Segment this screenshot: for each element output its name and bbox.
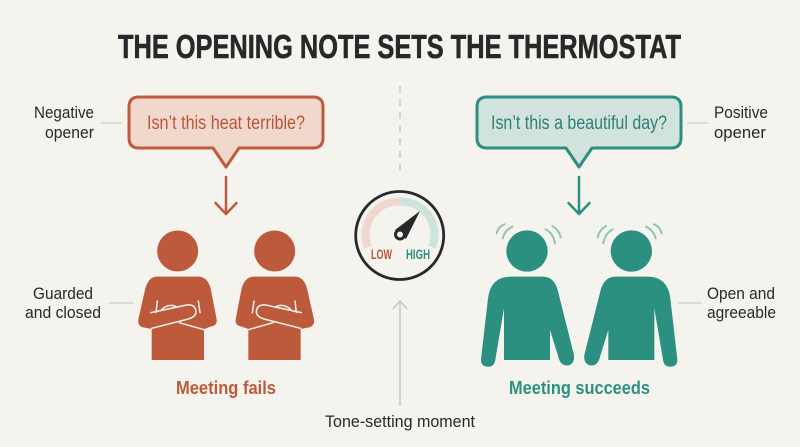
figure: open left [481, 224, 574, 367]
gauge [356, 192, 444, 280]
label: negative opener: Negative [34, 104, 94, 122]
speech bubble: negative: Isn’t this heat terrible? [147, 113, 305, 134]
figure: open right [584, 224, 677, 367]
label: positive opener: opener [714, 124, 766, 142]
figure: guarded left [138, 230, 217, 360]
label: positive opener: Positive [714, 104, 768, 122]
speech bubble: negative [129, 97, 323, 167]
label: meeting fails: Meeting fails [176, 377, 276, 398]
label: guarded and closed: Guarded [33, 285, 93, 303]
center dashed divider [399, 86, 401, 176]
arrow: negative [216, 177, 236, 214]
label: tone-setting moment: Tone-setting moment [325, 412, 475, 431]
figure: guarded right [236, 230, 314, 360]
label: guarded and closed: and closed [25, 304, 101, 322]
label: open and agreeable [678, 285, 776, 322]
arrow: positive [568, 177, 590, 214]
figures: guarded pair with crossed arms [138, 230, 314, 360]
label: guarded and closed [25, 285, 133, 322]
label: negative opener: opener [45, 124, 94, 142]
gauge: HIGH [406, 247, 430, 262]
gauge: LOW [371, 247, 392, 262]
label: positive opener [687, 104, 768, 142]
label: meeting succeeds: Meeting succeeds [509, 377, 650, 398]
arrow: tone-setting pointer [393, 301, 407, 406]
label: open and agreeable: agreeable [707, 304, 776, 322]
label: negative opener [34, 104, 122, 142]
speech bubble: positive [477, 97, 681, 167]
speech bubble: positive: Isn’t this a beautiful day? [491, 113, 667, 134]
label: open and agreeable: Open and [707, 285, 775, 303]
figures: open pair [481, 224, 677, 367]
